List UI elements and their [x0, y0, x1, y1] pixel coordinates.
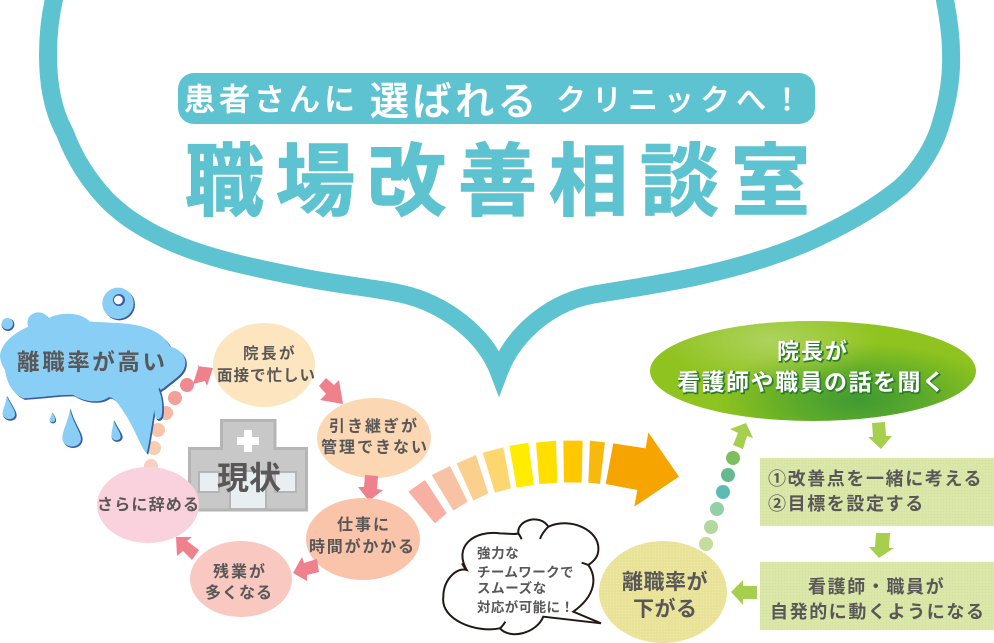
- arrow: to director busy: [193, 365, 213, 386]
- oval: handover unmanageable: 引き継ぎが: [329, 416, 419, 436]
- oval: more quit: [97, 467, 200, 543]
- callout: strong teamwork: 強力な: [477, 546, 519, 561]
- oval: turnover falls: 下がる: [633, 597, 698, 621]
- oval: director listens: 看護師や職員の話を聞く: [678, 370, 948, 396]
- dots: rising to head of cycle: [144, 378, 194, 473]
- arrow: to handover: [319, 378, 343, 404]
- oval: director listens: 院長が: [777, 339, 849, 364]
- oval: more quit: さらに辞める: [97, 496, 200, 514]
- subtitle pill: 選ばれる: [370, 81, 540, 124]
- oval: turnover falls: 離職率が: [622, 570, 708, 594]
- callout: strong teamwork: 対応が可能に！: [477, 599, 574, 615]
- arrow: to time-consuming: [358, 475, 383, 501]
- panel: improvement steps: [760, 458, 994, 526]
- subtitle pill: [178, 73, 815, 124]
- oval: work takes time: 仕事に: [337, 515, 391, 534]
- oval: director busy: [213, 323, 316, 407]
- callout: strong teamwork: チームワークで: [477, 565, 574, 580]
- subtitle pill: 患者さんに: [184, 82, 359, 118]
- dots: rising to director listens: [699, 451, 740, 551]
- panel: improvement steps: ①改善点を一緒に考える: [768, 469, 983, 489]
- speech bubble outline: [48, 0, 951, 372]
- oval: overtime: [190, 541, 292, 617]
- oval: overtime: 残業が: [213, 562, 267, 581]
- blob: high turnover: [0, 288, 187, 455]
- panel: improvement steps: ②目標を設定する: [768, 494, 925, 514]
- icon: hospital: 現状: [217, 460, 281, 496]
- oval: overtime: 多くなる: [205, 584, 273, 602]
- icon: hospital: [190, 420, 306, 510]
- oval: work takes time: [306, 498, 420, 580]
- arrow: up to director: [730, 423, 753, 449]
- arrow: to quit: [176, 537, 199, 560]
- panel: staff act on own: 看護師・職員が: [808, 576, 945, 597]
- oval: director listens: [650, 321, 976, 421]
- arrow: down to staff panel: [869, 533, 894, 558]
- callout: strong teamwork: [443, 519, 601, 634]
- oval: director busy: 面接で忙しい: [217, 366, 316, 384]
- oval: work takes time: 時間がかかる: [309, 537, 416, 556]
- arrow: large gradient transition: [408, 432, 679, 523]
- oval: turnover falls: [599, 541, 727, 643]
- arrow: down to step list: [868, 422, 892, 449]
- panel: staff act on own: [760, 562, 994, 630]
- oval: director busy: 院長が: [243, 344, 297, 362]
- oval: director listens: 院長が: [778, 340, 850, 365]
- oval: handover unmanageable: 管理できない: [321, 438, 429, 456]
- arrow: left to turnover falls: [731, 580, 757, 605]
- blob: high turnover: 離職率が高い: [17, 349, 168, 375]
- arrow: to overtime: [293, 557, 319, 581]
- panel: staff act on own: 自発的に動くようになる: [770, 602, 986, 622]
- subtitle pill: クリニックへ！: [556, 84, 808, 118]
- oval: director listens: 看護師や職員の話を聞く: [677, 369, 946, 395]
- oval: handover unmanageable: [317, 398, 431, 478]
- title: 職場改善相談室: [185, 137, 822, 226]
- callout: strong teamwork: スムーズな: [477, 580, 547, 596]
